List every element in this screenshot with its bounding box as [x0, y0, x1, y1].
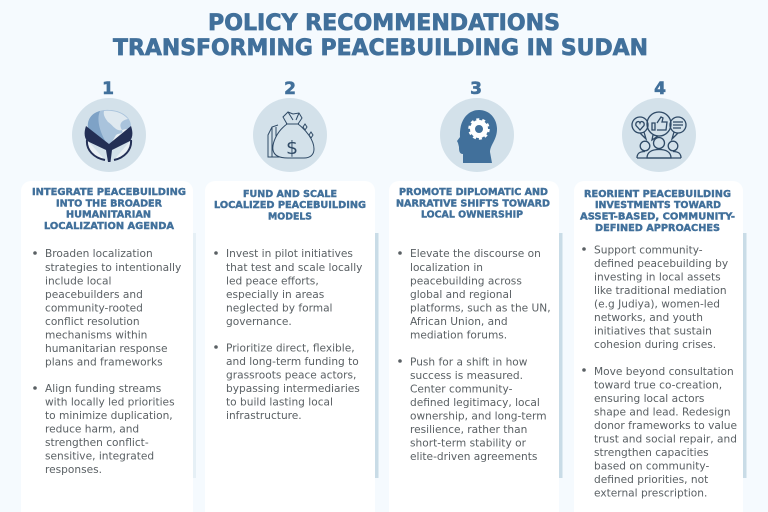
- card 3 body text: elite-driven agreements: [410, 451, 537, 463]
- card 3 body text: peacebuilding across: [410, 276, 522, 288]
- card 2 body text: Invest in pilot initiatives: [226, 248, 353, 260]
- card 1 body text: conflict resolution: [45, 316, 140, 328]
- card 4 body text: investing in local assets: [594, 272, 721, 284]
- card 2 body text: Prioritize direct, flexible,: [226, 342, 355, 354]
- card 2 body text: [214, 248, 362, 422]
- card 2 body text: bypassing intermediaries: [226, 383, 360, 395]
- card 3 body text: [398, 248, 551, 463]
- card 4 heading: [580, 189, 735, 234]
- card 3 body text: platforms, such as the UN,: [410, 302, 551, 314]
- card 4 body text: initiatives that sustain: [594, 326, 712, 338]
- card 3 heading: PROMOTE DIPLOMATIC AND: [399, 187, 548, 198]
- icon: globe in hands: [72, 98, 146, 172]
- card 2 body text: neglected by formal: [226, 302, 333, 314]
- card 3 body text: Elevate the discourse on: [410, 248, 541, 260]
- card 3 heading: LOCAL OWNERSHIP: [421, 210, 523, 220]
- icon: head with gear: [440, 98, 514, 172]
- card 1 body text: reduce harm, and: [45, 424, 139, 436]
- card 4 body text: donor frameworks to value: [594, 420, 737, 432]
- card 2 body text: and long-term funding to: [226, 356, 359, 368]
- card 1 heading: INTEGRATE PEACEBUILDING: [32, 187, 186, 198]
- card 3 body text: short-term stability or: [410, 438, 527, 450]
- panel: card 1: [21, 181, 196, 512]
- card 2 heading: MODELS: [268, 212, 312, 222]
- number 1: 1: [102, 79, 114, 99]
- card 2 body text: governance.: [226, 316, 292, 328]
- card 4 heading: DEFINED APPROACHES: [595, 223, 720, 234]
- card 3 body text: ownership, and long-term: [410, 410, 547, 422]
- card 1 heading: HUMANITARIAN: [66, 210, 151, 220]
- card 1 body text: peacebuilders and: [45, 289, 143, 301]
- card 3 body text: localization in: [410, 262, 483, 274]
- card 4 body text: Support community-: [594, 244, 703, 256]
- card 3 body text: resilience, rather than: [410, 424, 527, 436]
- number 2: 2: [284, 79, 296, 99]
- card 2 body text: to build lasting local: [226, 396, 333, 408]
- card 2 body text: that test and scale locally: [226, 262, 362, 274]
- card 2 heading: [214, 189, 366, 222]
- card 1 body text: responses.: [45, 464, 102, 476]
- number 4: 4: [654, 79, 666, 99]
- card 3 body text: Center community-: [410, 384, 513, 396]
- card 4 body text: based on community-: [594, 460, 709, 472]
- card 2 body text: infrastructure.: [226, 410, 302, 422]
- card 3 body text: success is measured.: [410, 370, 523, 382]
- title: TRANSFORMING PEACEBUILDING IN SUDAN: [113, 36, 648, 61]
- card 3 body text: Push for a shift in how: [410, 356, 528, 368]
- card 4 body text: defined priorities, not: [594, 474, 708, 486]
- card 1 body text: to minimize duplication,: [45, 410, 173, 422]
- card 2 body text: grassroots peace actors,: [226, 370, 356, 382]
- card 1 heading: INTO THE BROADER: [56, 198, 163, 210]
- title: POLICY RECOMMENDATIONS: [208, 11, 560, 36]
- panel: card 3: [389, 181, 562, 512]
- card 4 body text: external prescription.: [594, 488, 707, 500]
- icon: money bag: $: [286, 137, 298, 159]
- card 3 body text: African Union, and: [410, 316, 508, 328]
- card 2 body text: especially in areas: [226, 289, 324, 301]
- card 4 heading: ASSET-BASED, COMMUNITY-: [580, 212, 735, 222]
- card 4 body text: like traditional mediation: [594, 285, 727, 297]
- card 1 body text: sensitive, integrated: [45, 450, 154, 462]
- card 1 body text: with locally led priorities: [45, 396, 175, 408]
- card 4 body text: ensuring local actors: [594, 393, 704, 405]
- card 4 body text: [582, 244, 737, 500]
- panel: card 4: [574, 181, 746, 512]
- card 3 body text: global and regional: [410, 289, 512, 301]
- card 4 body text: defined peacebuilding by: [594, 258, 728, 270]
- card 4 body text: toward true co-creation,: [594, 380, 722, 392]
- card 4 body text: (e.g Judiya), women-led: [594, 298, 720, 310]
- card 1 body text: plans and frameworks: [45, 356, 163, 368]
- card 3 heading: NARRATIVE SHIFTS TOWARD: [396, 198, 550, 210]
- card 1 body text: community-rooted: [45, 302, 143, 314]
- card 4 body text: networks, and youth: [594, 312, 703, 324]
- card 1 body text: Broaden localization: [45, 248, 153, 260]
- card 1 body text: humanitarian response: [45, 343, 168, 355]
- title: [113, 11, 648, 61]
- card 1 body text: [33, 248, 181, 476]
- card 3 body text: mediation forums.: [410, 330, 507, 342]
- card 2 heading: LOCALIZED PEACEBUILDING: [214, 200, 366, 211]
- card 1 body text: include local: [45, 276, 111, 288]
- panel: card 2: [205, 181, 378, 512]
- card 2 body text: led peace efforts,: [226, 276, 319, 288]
- icon: money bag: [253, 98, 327, 172]
- card 4 body text: shape and lead. Redesign: [594, 406, 731, 418]
- card 3 body text: defined legitimacy, local: [410, 397, 540, 409]
- card 4 body text: trust and social repair, and: [594, 434, 737, 446]
- card 4 body text: cohesion during crises.: [594, 339, 716, 351]
- number 3: 3: [470, 79, 482, 99]
- card 2 heading: FUND AND SCALE: [243, 189, 337, 200]
- card 4 body text: strengthen capacities: [594, 447, 709, 459]
- card 3 heading: [396, 187, 550, 220]
- card 4 heading: REORIENT PEACEBUILDING: [584, 189, 731, 200]
- card 4 body text: Move beyond consultation: [594, 366, 734, 378]
- card 4 heading: INVESTMENTS TOWARD: [595, 200, 721, 211]
- card 1 body text: mechanisms within: [45, 330, 147, 342]
- card 1 heading: [32, 187, 186, 232]
- icon: community feedback: [622, 98, 696, 172]
- card 1 body text: Align funding streams: [45, 383, 161, 395]
- card 1 body text: strengthen conflict-: [45, 437, 149, 449]
- card 1 heading: LOCALIZATION AGENDA: [44, 221, 175, 232]
- card 1 body text: strategies to intentionally: [45, 262, 181, 274]
